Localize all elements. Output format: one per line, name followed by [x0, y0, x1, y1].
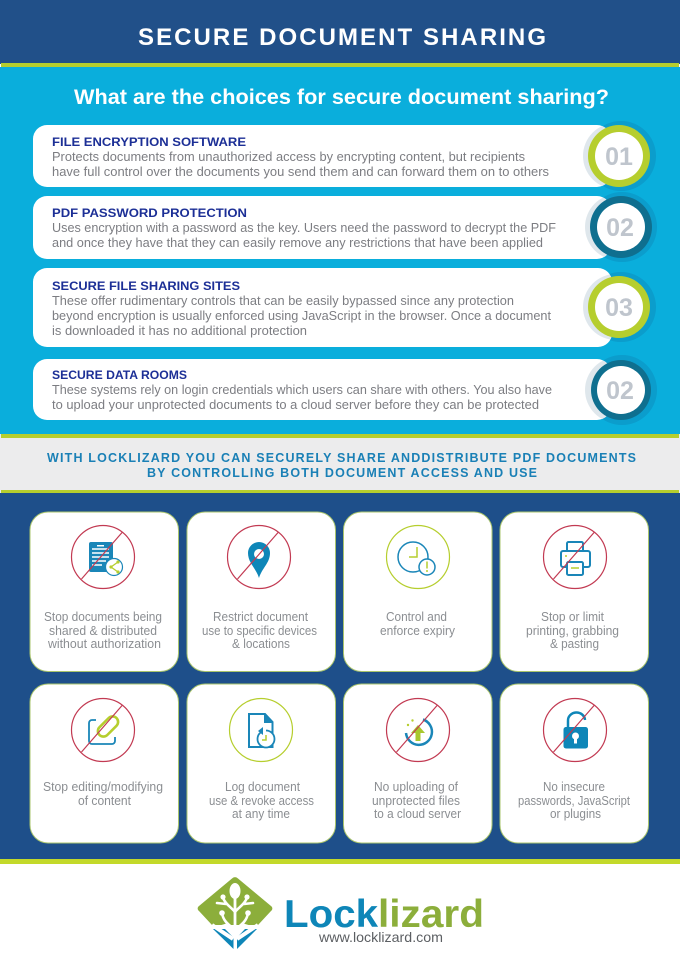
choice 1: file encryption software [33, 121, 656, 191]
icon: upload arrow, prohibited [386, 698, 450, 762]
feature text: to a cloud server [374, 806, 462, 821]
number badge 02 (fourth) [585, 357, 651, 423]
choice 3 heading: SECURE FILE SHARING SITES [52, 279, 240, 293]
feature text: use to specific devices [202, 623, 317, 638]
banner text: BY CONTROLLING BOTH DOCUMENT ACCESS AND USE [147, 466, 537, 480]
choice 4 description: These systems rely on login credentials which users can share with others. You also have [52, 382, 552, 397]
panel heading: What are the choices for secure document sharing? [74, 85, 609, 109]
feature text: or plugins [550, 806, 601, 821]
choice 4 description [52, 382, 552, 412]
icon: pencil and frame, prohibited [72, 698, 134, 762]
feature card: printing [500, 512, 648, 672]
feature text [372, 779, 462, 821]
choice 4 description: to upload your unprotected documents to a cloud server before they can be protected [52, 397, 539, 412]
icon: location pin, prohibited [228, 526, 290, 588]
feature text: enforce expiry [380, 623, 456, 638]
feature text: No insecure [543, 779, 605, 794]
title: SECURE DOCUMENT SHARING [138, 24, 546, 51]
feature text [526, 609, 619, 651]
icon: clock with alert [386, 526, 450, 588]
choice 4 heading: SECURE DATA ROOMS [52, 368, 187, 382]
feature text: at any time [232, 806, 290, 821]
feature text: Log document [225, 779, 300, 794]
feature text [202, 609, 317, 651]
feature text: without authorization [47, 636, 161, 651]
choice 2 heading: PDF PASSWORD PROTECTION [52, 206, 247, 220]
icon: printer, prohibited [544, 526, 606, 588]
feature text [209, 779, 314, 821]
feature text: passwords, JavaScript [518, 793, 630, 808]
feature card: insecure passwords [500, 684, 648, 843]
choice 1 description: have full control over the documents you send them and can forward them on to others [52, 164, 549, 179]
banner: with locklizard [0, 434, 680, 493]
choice 1 description: Protects documents from unauthorized access by encrypting content, but recipients [52, 149, 525, 164]
panel: choices for secure document sharing [0, 67, 680, 434]
feature card: log and revoke [187, 684, 336, 843]
choice 3: secure file sharing sites [33, 268, 656, 347]
number badge 03: 03 [605, 294, 633, 322]
feature card: restrict devices and locations [187, 512, 336, 672]
choice 4: secure data rooms [33, 355, 657, 425]
feature text: & pasting [550, 636, 599, 651]
choice 3 description: is downloaded it has no additional protection [52, 323, 307, 338]
choice 1 heading: FILE ENCRYPTION SOFTWARE [52, 135, 246, 149]
choice 3 description: These offer rudimentary controls that can be easily bypassed since any protection [52, 293, 514, 308]
number badge 01: 01 [605, 143, 633, 171]
banner text: WITH LOCKLIZARD YOU CAN SECURELY SHARE ANDDISTRIBUTE PDF DOCUMENTS [47, 451, 636, 465]
icon: open padlock, prohibited [544, 698, 606, 762]
feature text: shared & distributed [49, 623, 157, 638]
logo url: www.locklizard.com [318, 929, 443, 945]
feature card: editing [30, 684, 178, 843]
number badge 02 (fourth): 02 [606, 377, 634, 405]
icon: document with history arrow [230, 698, 292, 762]
feature text: use & revoke access [209, 793, 314, 808]
feature text: Stop documents being [44, 609, 162, 624]
feature text: No uploading of [374, 779, 458, 794]
feature text [380, 609, 456, 638]
number badge 01 [583, 123, 650, 189]
feature card: stop sharing [30, 512, 178, 672]
feature card: expiry [344, 512, 492, 672]
choice 2 description [52, 220, 556, 250]
feature text [518, 779, 630, 821]
icon: document with share badge, prohibited [72, 526, 134, 588]
choice 3 description [52, 293, 551, 338]
logo: locklizard [198, 877, 484, 949]
feature text: printing, grabbing [526, 623, 619, 638]
choice 2: pdf password protection [33, 192, 657, 262]
feature text [43, 779, 163, 808]
choice 2 description: and once they have that they can easily remove any restrictions that have been applied [52, 235, 543, 250]
panel: locklizard features [0, 493, 680, 859]
logo wordmark: Lock [284, 893, 378, 936]
choice 1 description [52, 149, 549, 179]
footer divider [0, 859, 680, 864]
feature text: Control and [386, 609, 447, 624]
number badge 02 [585, 194, 652, 260]
feature text: of content [78, 793, 131, 808]
logo mark [198, 877, 272, 949]
feature text: Stop or limit [541, 609, 604, 624]
feature text [44, 609, 162, 651]
logo wordmark: lizard [378, 893, 484, 936]
banner text [47, 451, 636, 480]
header band [0, 0, 680, 67]
choice 2 description: Uses encryption with a password as the key. Users need the password to decrypt the PDF [52, 220, 556, 235]
number badge 03 [583, 274, 650, 340]
feature text: Restrict document [213, 609, 308, 624]
feature card: cloud uploading [344, 684, 492, 843]
logo wordmark [284, 893, 484, 936]
choice 3 description: beyond encryption is usually enforced using JavaScript in the browser. Once a document [52, 308, 551, 323]
number badge 02: 02 [606, 214, 634, 242]
feature text: Stop editing/modifying [43, 779, 163, 794]
feature text: unprotected files [372, 793, 460, 808]
feature text: & locations [232, 636, 290, 651]
